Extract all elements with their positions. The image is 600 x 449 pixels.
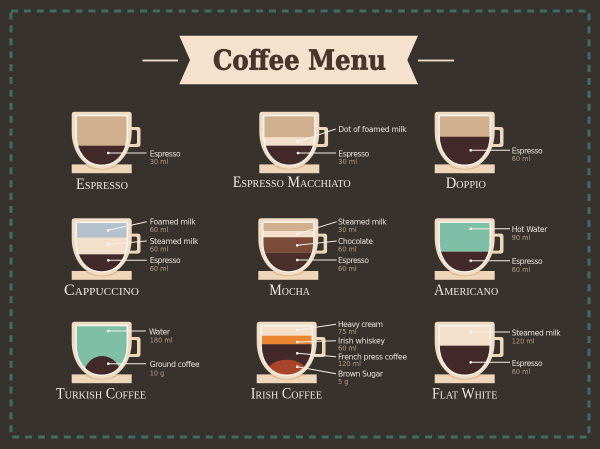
panel: mocha: 60 ml [338,246,357,254]
panel: espresso macchiato: Dot of foamed milk [338,125,407,134]
panel: cappuccino: 60 ml [150,226,169,234]
panel: americano: 60 ml [512,266,531,274]
panel: espresso: Espresso [150,150,181,158]
panel: cappuccino: 60 ml [150,265,169,273]
panel: flat white: Flat White [432,386,498,403]
panel: espresso macchiato: Espresso [338,150,370,158]
panel: mocha: Mocha [269,282,310,299]
panel: cappuccino: Espresso [150,256,181,265]
panel: doppio: 60 ml [512,155,531,163]
panel: turkish coffee: Water [149,328,171,336]
panel: espresso macchiato: Espresso Macchiato [233,174,351,191]
panel: mocha: Espresso [338,256,369,265]
panel: flat white: Steamed milk [512,328,561,338]
panel: cappuccino: Foamed milk [150,218,196,226]
panel: espresso: Espresso [76,176,128,193]
panel: flat white [432,322,561,403]
panel: espresso macchiato [233,112,407,191]
panel: americano: Espresso [512,257,543,266]
panel: turkish coffee: 10 g [150,370,164,378]
panel: turkish coffee: Ground coffee [150,360,200,369]
title: Coffee Menu [213,46,386,76]
panel: espresso macchiato: 30 ml [338,158,357,166]
panel: mocha [258,218,387,299]
panel: mocha: Steamed milk [338,218,387,226]
panel: mocha: Chocolate [338,237,373,246]
panel: turkish coffee [56,322,200,403]
panel: irish coffee: French press coffee [338,352,407,362]
panel: doppio: Espresso [512,146,543,156]
panel: turkish coffee: Turkish Coffee [56,386,146,403]
panel: irish coffee: Irish Coffee [251,386,322,403]
panel: turkish coffee: 180 ml [150,336,173,344]
panel: mocha: 60 ml [338,265,357,273]
panel: cappuccino [64,218,199,299]
title ribbon [142,36,454,84]
panel: cappuccino: Steamed milk [150,237,199,246]
panel: irish coffee [251,320,407,403]
panel: irish coffee: 5 g [338,378,348,386]
panel: doppio [435,112,543,192]
panel: irish coffee: 60 ml [338,344,357,352]
panel: americano: Americano [434,282,498,299]
panel: irish coffee: Brown Sugar [338,370,384,378]
panel: irish coffee: Irish whiskey [338,336,386,346]
panel: irish coffee: Heavy cream [338,320,383,329]
panel: espresso: 30 ml [150,158,169,166]
panel: doppio: Doppio [446,175,486,192]
panel: cappuccino: 60 ml [150,246,169,254]
panel: flat white: 60 ml [512,368,531,376]
panel: espresso [72,112,181,193]
panel: americano [434,218,548,299]
panel: flat white: Espresso [512,359,543,368]
panel: irish coffee: 75 ml [338,328,357,336]
panel: mocha: 30 ml [338,226,357,234]
panel: flat white: 120 ml [512,338,535,346]
panel: irish coffee: 120 ml [338,360,361,368]
panel: americano: 90 ml [512,234,531,242]
panel: americano: Hot Water [512,225,548,234]
panel: cappuccino: Cappuccino [64,282,139,299]
